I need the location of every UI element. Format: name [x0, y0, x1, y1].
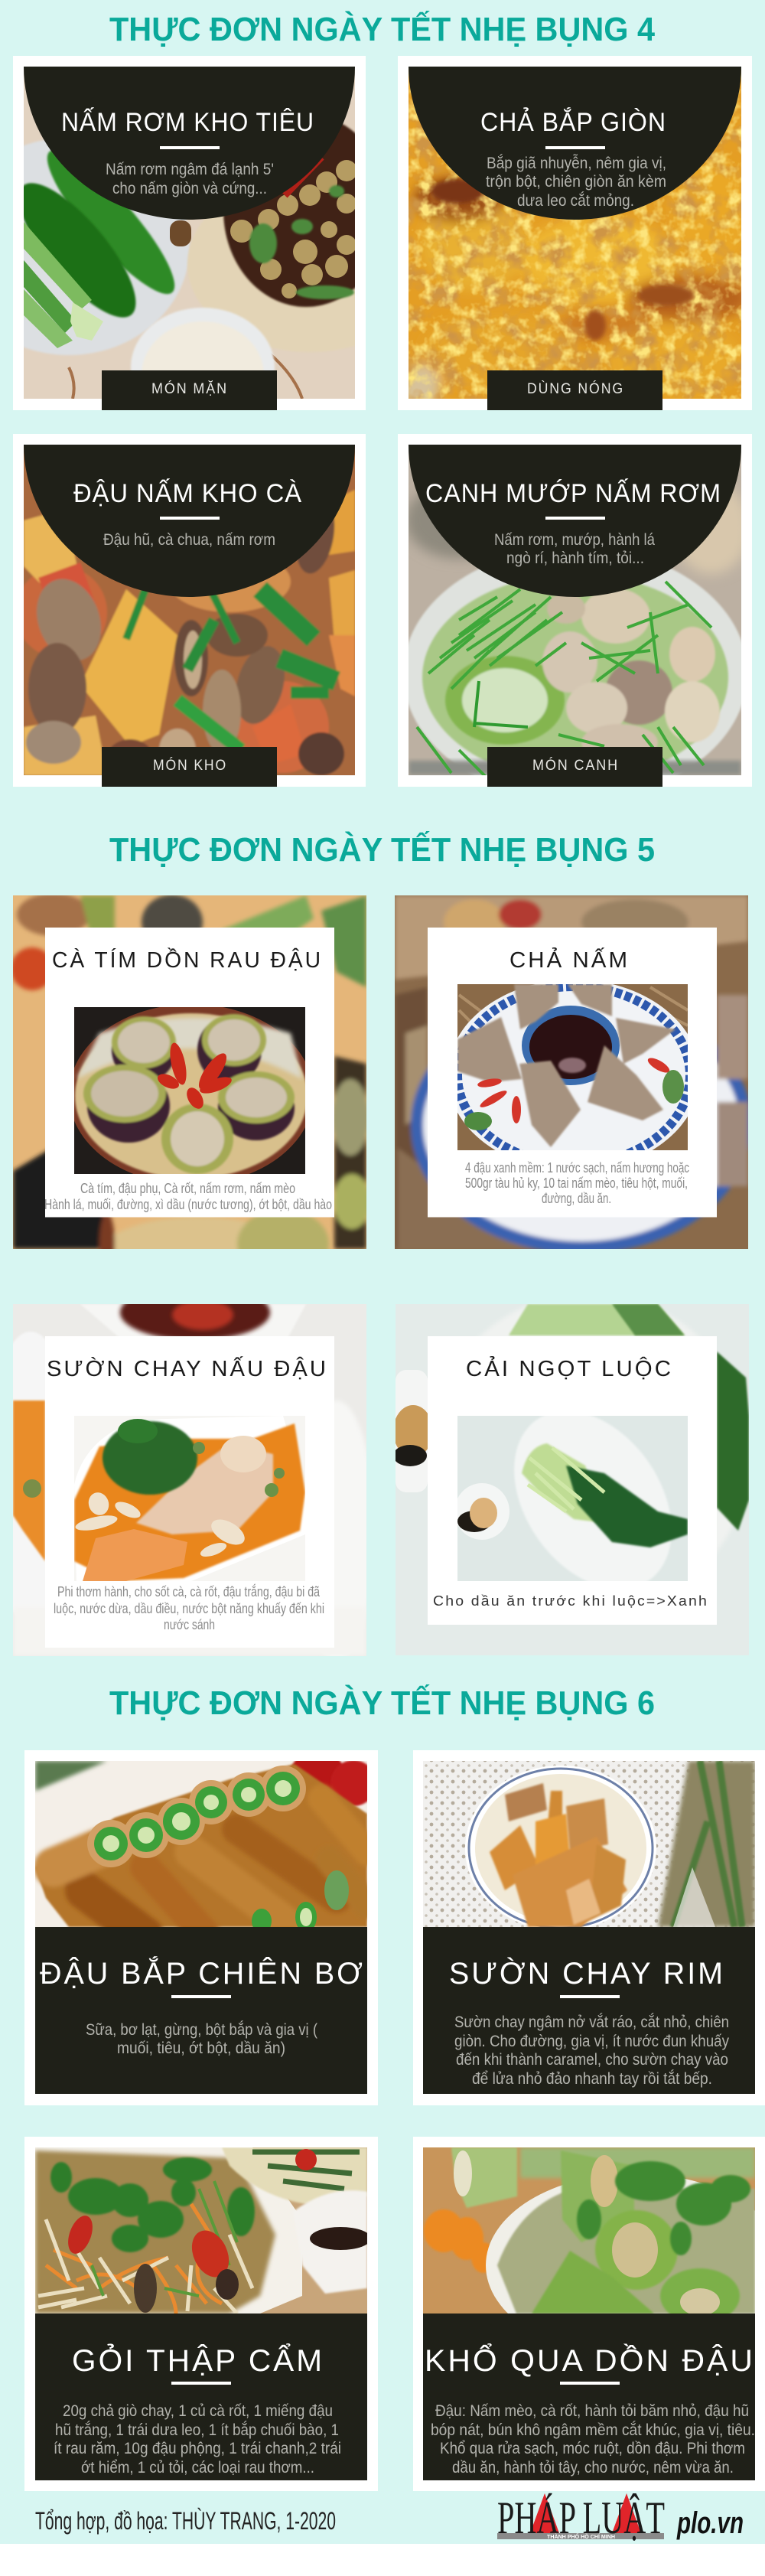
description: nước sánh	[164, 1617, 215, 1632]
description	[465, 1160, 689, 1206]
description: giòn. Cho đường, gia vị, ít nước đun khuấy	[454, 2033, 729, 2050]
dark half ellipse	[409, 67, 741, 220]
description: để lửa nhỏ đảo nhanh tay rồi tắt bếp.	[472, 2070, 712, 2088]
white text panel	[45, 928, 334, 1217]
panel: Cà tím dồn rau đậu	[13, 895, 366, 1249]
description	[486, 155, 666, 210]
dark half ellipse	[24, 445, 355, 597]
description	[44, 1181, 332, 1212]
photo: mixed salad	[35, 2147, 371, 2314]
description: luộc, nước dừa, dầu điều, nước bột năng khuấy đến khi	[54, 1601, 324, 1616]
photo: luffa mushroom soup	[409, 446, 741, 775]
description	[54, 2402, 341, 2477]
description	[494, 531, 655, 567]
background photo: pale table with greens	[393, 1293, 750, 1655]
white text panel	[428, 928, 717, 1217]
description: hũ trắng, 1 trái dưa leo, 1 ít bắp chuối bào, 1	[55, 2421, 339, 2439]
dark half ellipse	[24, 67, 355, 220]
dish title: CÀ TÍM DỒN RAU ĐẬU	[52, 947, 323, 973]
dark text block	[423, 1927, 755, 2094]
dark text block	[35, 2314, 367, 2480]
white text panel	[45, 1336, 334, 1648]
description: dầu ăn, hành tỏi tây, cho nước, nêm vừa ăn.	[452, 2459, 734, 2477]
description	[106, 161, 274, 197]
panel: Sườn chay rim	[413, 1750, 765, 2105]
dish title: CẢI NGỌT LUỘC	[466, 1355, 673, 1381]
dish title: ĐẬU NẤM KHO CÀ	[73, 479, 302, 508]
dish title: NẤM RƠM KHO TIÊU	[61, 108, 314, 137]
description	[54, 1583, 324, 1632]
panel: Sườn chay nấu đậu	[13, 1304, 366, 1656]
background photo: white dishes	[13, 1304, 366, 1656]
panel: Khổ qua dồn đậu	[413, 2137, 765, 2491]
heading: menu 5: THỰC ĐƠN NGÀY TẾT NHẸ BỤNG 5	[109, 830, 655, 869]
logo: Pháp Luật: PHÁP LUẬT	[497, 2493, 665, 2543]
inset photo: vegan ribs with beans	[74, 1416, 305, 1581]
panel: Nấm rơm kho tiêu	[13, 56, 366, 410]
dish title: KHỔ QUA DỒN ĐẬU	[425, 2342, 755, 2378]
logo: Pháp Luật: THÀNH PHỐ HỒ CHÍ MINH	[547, 2532, 615, 2540]
white text panel	[428, 1336, 717, 1625]
description: Hành lá, muối, đường, xì dầu (nước tương), ớt bột, dầu hào	[44, 1197, 332, 1212]
photo: fried okra rolls	[35, 1761, 367, 1927]
description: trộn bột, chiên giòn ăn kèm	[486, 173, 666, 191]
description: 20g chả giò chay, 1 củ cà rốt, 1 miếng đậu	[63, 2402, 333, 2420]
dish title: GỎI THẬP CẨM	[72, 2342, 324, 2378]
description: Cà tím, đậu phụ, Cà rốt, nấm rơm, nấm mèo	[80, 1181, 295, 1196]
dark text block	[423, 2314, 755, 2480]
description: Sườn chay ngâm nở vắt ráo, cắt nhỏ, chiên	[454, 2014, 729, 2031]
heading: menu 6: THỰC ĐƠN NGÀY TẾT NHẸ BỤNG 6	[109, 1684, 655, 1722]
dark half ellipse	[409, 445, 741, 597]
description: đường, dầu ăn.	[542, 1191, 611, 1206]
label bar	[102, 370, 277, 410]
photo: caramelised vegan ribs on lace	[423, 1761, 755, 1931]
label bar: MÓN KHO	[153, 757, 227, 774]
description: Đậu hũ, cà chua, nấm rơm	[103, 531, 275, 549]
description: Bắp giã nhuyễn, nêm gia vị,	[487, 155, 666, 172]
panel: Đậu bắp chiên bơ	[24, 1750, 378, 2105]
description: ngò rí, hành tím, tỏi...	[506, 549, 644, 567]
description: Nấm rơm, mướp, hành lá	[494, 531, 655, 549]
description	[86, 2021, 317, 2057]
inset photo: boiled greens	[457, 1416, 688, 1581]
description: dưa leo cắt mỏng.	[517, 192, 634, 210]
description: cho nấm giòn và cứng...	[112, 180, 267, 197]
photo: tofu mushroom tomato	[15, 437, 363, 783]
photo: stuffed bitter melon soup	[423, 2147, 765, 2357]
panel: Gỏi thập cẩm	[24, 2137, 378, 2491]
label bar: MÓN CANH	[532, 757, 619, 774]
label bar: DÙNG NÓNG	[527, 380, 624, 397]
description: đến khi thành caramel, cho sườn chay vào	[456, 2051, 728, 2069]
description: 500gr tàu hủ ky, 10 tai nấm mèo, tiêu hột, muối,	[465, 1176, 688, 1191]
label bar	[487, 747, 662, 787]
photo: mushroom stew with cucumber	[24, 69, 355, 399]
inset photo: vegetarian mushroom loaf	[457, 984, 688, 1150]
logo: Pháp Luật	[497, 2493, 665, 2543]
description: ít rau răm, 10g đậu phộng, 1 trái chanh,2 trái	[54, 2440, 341, 2457]
heading: menu 4: THỰC ĐƠN NGÀY TẾT NHẸ BỤNG 4	[109, 10, 655, 48]
dish title: ĐẬU BẮP CHIÊN BƠ	[40, 1955, 365, 1991]
description: muối, tiêu, ớt bột, dầu ăn)	[117, 2040, 285, 2057]
dish title: CHẢ NẤM	[509, 947, 630, 973]
background photo: wood table with vegetables	[13, 895, 366, 1249]
description: Phi thơm hành, cho sốt cà, cà rốt, đậu trắng, đậu bi đã	[57, 1583, 321, 1599]
panel: Canh mướp nấm rơm	[398, 434, 752, 800]
background photo: wood and plate	[395, 895, 748, 1249]
dish title: SƯỜN CHAY NẤU ĐẬU	[47, 1355, 328, 1381]
inset photo: stuffed eggplant	[74, 1007, 305, 1174]
description	[431, 2402, 755, 2477]
label bar	[487, 370, 662, 410]
description: Nấm rơm ngâm đá lạnh 5'	[106, 161, 274, 178]
description	[454, 2014, 729, 2088]
photo: crispy corn fritter	[401, 67, 750, 409]
dark text block	[35, 1927, 367, 2094]
label bar	[102, 747, 277, 787]
dish title: CHẢ BẮP GIÒN	[480, 108, 666, 137]
dish title: SƯỜN CHAY RIM	[449, 1956, 725, 1991]
description: ớt hiểm, 1 củ tỏi, các loại rau thơm...	[81, 2459, 314, 2477]
label bar: MÓN MẶN	[151, 380, 228, 397]
panel: Đậu nấm kho cà	[13, 434, 366, 787]
logo: plo.vn: plo.vn	[676, 2506, 744, 2540]
panel: Chả bắp giòn	[398, 56, 752, 410]
description: Cho dầu ăn trước khi luộc=>Xanh	[433, 1593, 708, 1609]
panel: Chả nấm	[395, 895, 748, 1249]
description: 4 đậu xanh mềm: 1 nước sạch, nấm hương hoặc	[465, 1160, 689, 1176]
dish title: CANH MƯỚP NẤM RƠM	[425, 479, 721, 508]
panel: Cải ngọt luộc	[393, 1293, 750, 1655]
description: Sữa, bơ lạt, gừng, bột bắp và gia vị (	[86, 2021, 317, 2039]
credit line: Tổng hợp, đồ họa: THÙY TRANG, 1-2020	[35, 2507, 336, 2535]
